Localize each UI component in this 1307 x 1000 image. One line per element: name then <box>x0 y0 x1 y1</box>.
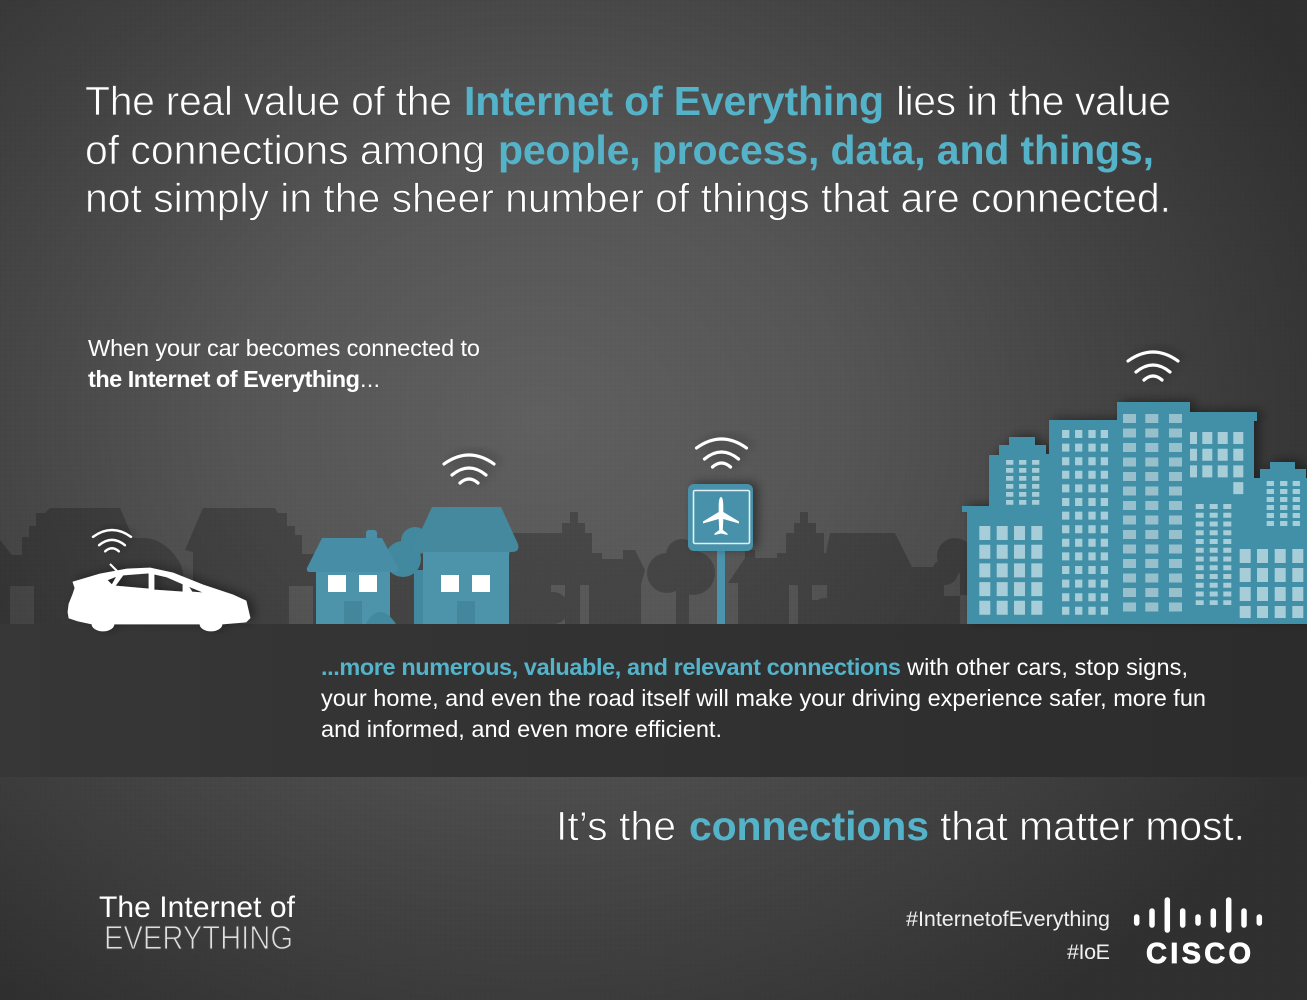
intro text: the Internet of Everything <box>88 366 360 392</box>
car <box>68 530 250 631</box>
band text: your home, and even the road itself will make your driving experience safer, more fun <box>321 685 1206 711</box>
headline: of connections among <box>85 127 485 173</box>
icon: city wifi <box>1128 352 1178 380</box>
intro text: When your car becomes connected to <box>88 335 480 361</box>
headline: The real value of the <box>85 78 452 124</box>
Cisco logo <box>1137 900 1259 970</box>
Internet of Everything logo: EVERYTHING <box>104 919 293 956</box>
hashtags: #InternetofEverything <box>906 907 1110 931</box>
band text: with other cars, stop signs, <box>906 654 1188 680</box>
car body <box>68 564 250 631</box>
headline: lies in the value <box>896 78 1171 124</box>
hashtags: #IoE <box>1067 940 1110 964</box>
city windows <box>985 414 1298 618</box>
tagline: connections <box>689 803 929 849</box>
large house <box>413 507 518 624</box>
headline <box>85 78 1171 221</box>
headline: not simply in the sheer number of things that are connected. <box>85 175 1171 221</box>
tree behind houses <box>385 527 429 624</box>
band text: ...more numerous, valuable, and relevant connections <box>321 654 901 680</box>
Internet of Everything logo: The Internet of <box>99 891 296 924</box>
icon: cisco bars <box>1137 900 1259 930</box>
Internet of Everything logo <box>99 891 296 956</box>
intro text <box>88 335 480 392</box>
icon: sign wifi <box>696 439 746 467</box>
icon: airplane <box>703 497 739 535</box>
tagline <box>556 803 1245 849</box>
city skyline <box>962 402 1307 624</box>
Cisco logo: CISCO <box>1146 938 1251 970</box>
band text: and informed, and even more efficient. <box>321 716 722 742</box>
background skyline silhouette <box>0 508 973 624</box>
small house <box>307 530 398 624</box>
sign board <box>688 484 753 551</box>
tagline: that matter most. <box>940 803 1245 849</box>
icon: house wifi <box>444 455 494 483</box>
headline: people, process, data, and things, <box>498 127 1154 173</box>
tagline: It’s the <box>556 803 676 849</box>
hashtags <box>906 907 1110 964</box>
icon: car wifi <box>93 530 131 551</box>
band text <box>321 654 1206 742</box>
headline: Internet of Everything <box>464 78 884 124</box>
sign pole <box>717 548 725 624</box>
airport sign <box>688 439 753 624</box>
ground band <box>0 624 1307 777</box>
city <box>962 352 1307 624</box>
houses <box>307 455 518 624</box>
intro text: ... <box>360 366 380 392</box>
